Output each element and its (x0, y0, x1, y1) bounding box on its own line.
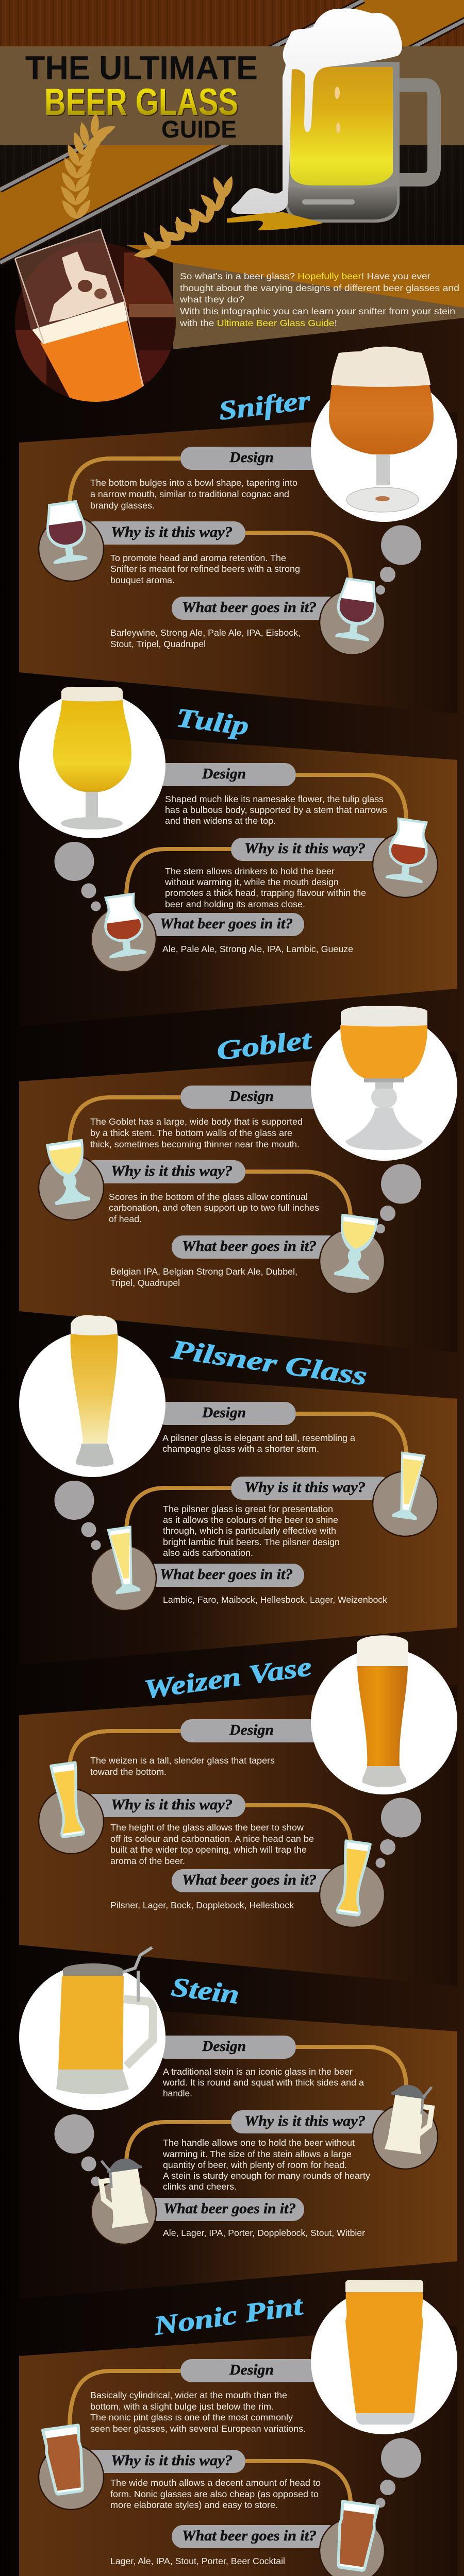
photo: tulip glass (19, 687, 165, 838)
thought bubbles (375, 2438, 421, 2508)
icon: weizen 1 (49, 1761, 87, 1839)
text: why: without warming it, while the mouth design (164, 877, 339, 887)
text: why: A stein is sturdy enough for many rounds of hearty (163, 2171, 370, 2181)
icon: wheat stalk left (58, 112, 117, 222)
icon circle 2 (91, 2179, 156, 2244)
text: design (90, 2390, 306, 2434)
icon circle 1 (373, 2104, 438, 2169)
connectors (70, 1097, 351, 1218)
icon: snifter 1 (43, 499, 90, 565)
icon circle 2 (320, 1229, 385, 1294)
beer foam (231, 8, 402, 214)
icon: snifter 2 (333, 577, 380, 642)
panel: tulip background (19, 728, 457, 1026)
pill: design: Design (229, 449, 274, 466)
icon: tulip 1 (385, 817, 432, 884)
text: what: Ale, Pale Ale, Strong Ale, IPA, Lambic, Gueuze (162, 944, 353, 954)
pill: what: What beer goes in it? (160, 916, 293, 932)
text: design (90, 1755, 275, 1777)
icon circle 2 (320, 1862, 385, 1927)
photo: tilted beer glass in circle (15, 229, 180, 412)
intro text: thought about the varying designs of different beer glasses and (180, 283, 459, 293)
text: design: A pilsner glass is elegant and tall, resembling a (162, 1433, 355, 1443)
pill: why: Why is it this way? (111, 524, 233, 540)
pill: what (172, 597, 340, 620)
pill: what (144, 1564, 304, 1587)
icon: tulip 2 (100, 892, 147, 959)
pill: what (172, 2525, 340, 2548)
icon circle 1 (39, 1789, 104, 1854)
header wood background (0, 0, 464, 252)
text: what: Belgian IPA, Belgian Strong Dark Ale, Dubbel, (110, 1266, 297, 1277)
intro text: what they do? (179, 294, 244, 304)
connectors (70, 2371, 351, 2504)
text: why: as it allows the colours of the beer to shine (163, 1515, 338, 1525)
intro text: with the Ultimate Beer Glass Guide ! (179, 318, 337, 328)
photo: weizen glass (311, 1635, 457, 1794)
pill: what (172, 1235, 340, 1259)
icon: wheat stalk right (133, 175, 236, 260)
pill: what: What beer goes in it? (182, 2528, 317, 2544)
section: Goblet (19, 1006, 457, 1352)
connectors (70, 459, 351, 580)
text: why: more elaborate styles) and easy to store. (110, 2500, 278, 2510)
pill: design: Design (229, 1722, 274, 1738)
pill: what (172, 1869, 340, 1892)
text: design: The Goblet has a large, wide body that is supported (90, 1116, 303, 1127)
text: why (164, 866, 366, 909)
panel: weizen background (19, 1685, 457, 1986)
pill: design (155, 2036, 296, 2059)
pill: design (180, 447, 325, 470)
text: what: Tripel, Quadrupel (110, 1278, 180, 1288)
thought bubbles (55, 842, 101, 911)
beer mug glass (285, 62, 400, 223)
text: design: has a bulbous body, supported by a stem that narrows (165, 805, 387, 815)
thought bubbles (55, 1481, 101, 1550)
section: Snifter (19, 347, 457, 714)
text: design: toward the bottom. (90, 1767, 167, 1777)
text: design: and then widens at the top. (165, 816, 276, 826)
panel: pilsner background (19, 1367, 457, 1665)
text: design: handle. (163, 2088, 192, 2098)
text: why: Scores in the bottom of the glass allow continual (109, 1192, 308, 1202)
text: design: Basically cylindrical, wider at the mouth than the (90, 2390, 287, 2400)
photo: nonic glass (311, 2280, 457, 2434)
section: Weizen Vase (19, 1635, 457, 1986)
icon circle 2 (320, 590, 385, 655)
text: why (109, 1192, 319, 1224)
icon circle 2 (91, 1546, 156, 1611)
gold wedge behind intro (126, 245, 464, 309)
pill: design (180, 1086, 325, 1109)
icon circle 2 (320, 2518, 385, 2576)
pill: design: Design (229, 1088, 274, 1105)
text: what: Stout, Tripel, Quadrupel (110, 639, 206, 649)
connectors (70, 1731, 351, 1843)
text: design: The weizen is a tall, slender glass that tapers (90, 1755, 275, 1766)
pill: what: What beer goes in it? (182, 1872, 317, 1888)
title (25, 49, 258, 143)
text: design: The nonic pint glass is one of the most commonly (90, 2412, 293, 2422)
text: why: off its colour and carbonation. A nice head can be (110, 1834, 314, 1844)
text: what: Lager, Ale, IPA, Stout, Porter, Beer Cocktail (110, 2556, 285, 2566)
pill: why: Why is it this way? (111, 1797, 233, 1813)
panel: snifter background (19, 412, 457, 714)
title: BEER GLASS (44, 81, 238, 123)
pill: what (144, 2198, 304, 2221)
title: Goblet: Goblet (215, 1025, 314, 1066)
text: why: The handle allows one to hold the beer without (163, 2138, 355, 2148)
title: Tulip: Tulip (175, 703, 250, 741)
text: what: Ale, Lager, IPA, Porter, Dopplebock, Stout, Witbier (163, 2228, 365, 2238)
pill: why: Why is it this way? (244, 1479, 366, 1496)
text: what: Pilsner, Lager, Bock, Dopplebock, Hellesbock (110, 1900, 294, 1910)
title: THE ULTIMATE (25, 49, 258, 87)
pill: what: What beer goes in it? (182, 1238, 317, 1255)
text: why: promotes a thick head, trapping flavour within the (165, 888, 366, 898)
intro text (179, 271, 459, 328)
pill: why (231, 2110, 392, 2133)
thought bubbles (376, 1164, 421, 1233)
text: why: To promote head and aroma retention. The (110, 553, 286, 563)
icon circle 1 (39, 1155, 104, 1220)
text: why (162, 2138, 370, 2192)
section: Pilsner Glass (19, 1315, 457, 1665)
text: why: clinks and cheers. (163, 2181, 237, 2192)
title: GUIDE (161, 115, 237, 143)
text: why: The stem allows drinkers to hold the beer (165, 866, 335, 876)
text: why: bright lambic fruit beers. The pilsner design (163, 1537, 340, 1547)
photo: goblet glass (311, 1006, 457, 1161)
text: design (165, 794, 387, 826)
text: design: seen beer glasses, with several European variations. (90, 2424, 306, 2434)
pill: design (180, 1719, 325, 1742)
icon: nonic 2 (332, 2500, 379, 2573)
text: design: world. It is round and squat with thick sides and a (162, 2077, 364, 2088)
section: Stein (19, 1947, 457, 2299)
text: why: aroma of the beer. (110, 1856, 185, 1866)
title: Nonic Pint: Nonic Pint (152, 2291, 305, 2341)
mug handle (397, 85, 434, 180)
spilled beer puddle (227, 212, 323, 230)
pill: why: Why is it this way? (244, 2113, 366, 2129)
text: why: bouquet aroma. (110, 575, 175, 585)
title: Pilsner Glass: Pilsner Glass (169, 1335, 369, 1391)
text: what (110, 628, 301, 649)
text: design (162, 1433, 355, 1454)
text: design: bottom, with a slight bulge just below the rim. (90, 2401, 274, 2412)
icon: goblet 1 (46, 1139, 91, 1205)
pill: why (231, 1477, 392, 1500)
text: why: The height of the glass allows the beer to show (110, 1822, 304, 1833)
text: why: beer and holding its aromas close. (165, 899, 305, 909)
text: why: warming it. The size of the stein allows a large (162, 2149, 352, 2159)
text: design (90, 478, 297, 511)
section: Tulip (19, 687, 457, 1026)
icon circle 1 (39, 516, 104, 581)
pill: why (82, 2450, 245, 2473)
text: why: The pilsner glass is great for presentation (163, 1504, 333, 1514)
pill: why (82, 1160, 245, 1183)
pill: why (231, 838, 392, 861)
text: what: Barleywine, Strong Ale, Pale Ale, IPA, Eisbock, (110, 628, 301, 638)
pill: design (155, 1402, 296, 1425)
intro text: With this infographic you can learn your snifter from your stein (180, 306, 455, 316)
text: why (110, 553, 300, 585)
intro text: So what's in a beer glass? Hopefully beer ! Have you ever (180, 271, 430, 281)
icon circle 1 (39, 2445, 104, 2510)
panel: stein background (19, 2001, 457, 2299)
pill: why: Why is it this way? (111, 2452, 233, 2469)
icon: pilsner 2 (107, 1526, 141, 1595)
icon: stein 1 (384, 2081, 435, 2155)
panel: goblet background (19, 1051, 457, 1352)
thought bubbles (55, 2114, 101, 2187)
text: why: carbonation, and often support up to two full inches (109, 1202, 319, 1213)
photo: snifter glass (311, 347, 457, 522)
text: what (110, 1266, 297, 1288)
thought bubbles (375, 1798, 421, 1868)
pill: design: Design (202, 2038, 246, 2055)
panel: intro background (173, 263, 464, 349)
pill: design (180, 2359, 325, 2382)
pill: what (144, 913, 304, 936)
text: why: quantity of beer, with plenty of room for head. (163, 2160, 347, 2170)
icon: nonic 1 (41, 2424, 89, 2497)
pill: why (82, 1794, 245, 1817)
text: why: Snifter is meant for refined beers with a strong (110, 564, 300, 574)
icon: pilsner 1 (392, 1451, 426, 1520)
pill: why (82, 521, 245, 545)
connectors (126, 1414, 406, 1533)
icon circle 1 (373, 1471, 438, 1536)
title: BEER GLASS (45, 82, 239, 124)
pill: what: What beer goes in it? (182, 599, 317, 616)
icon: goblet 2 (333, 1214, 378, 1280)
photo: stein (19, 1947, 165, 2110)
text: why: also aids carbonation. (163, 1548, 253, 1558)
text: why: of head. (109, 1214, 142, 1224)
text: why (163, 1504, 340, 1558)
title band (0, 46, 464, 145)
text: why: through, which is particularly effective with (163, 1526, 336, 1536)
text: design: brandy glasses. (90, 500, 155, 511)
text: why (110, 2478, 321, 2510)
pill: what: What beer goes in it? (163, 2200, 296, 2217)
text: design: a narrow mouth, similar to traditional cognac and (90, 489, 289, 499)
pill: design: Design (202, 1404, 246, 1421)
text: what: Lambic, Faro, Maibock, Hellesbock, Lager, Weizenbock (163, 1595, 387, 1605)
connectors (126, 775, 406, 897)
icon circle 2 (91, 907, 156, 972)
connectors (126, 2047, 406, 2164)
pill: why: Why is it this way? (111, 1163, 233, 1179)
pill: design: Design (202, 766, 246, 782)
title: Weizen Vase: Weizen Vase (142, 1652, 313, 1705)
title: Stein: Stein (170, 1972, 241, 2010)
text: design: Shaped much like its namesake flower, the tulip glass (165, 794, 384, 804)
text: why (110, 1822, 314, 1866)
text: design: A traditional stein is an iconic glass in the beer (163, 2066, 353, 2077)
icon circle 1 (373, 833, 438, 897)
text: design (162, 2066, 364, 2098)
text: design: thick, sometimes becoming thinner near the mouth. (90, 1139, 300, 1149)
text: design: champagne glass with a shorter stem. (162, 1444, 319, 1454)
diagonal gold stripe (0, 0, 464, 263)
section: Nonic Pint (19, 2280, 457, 2576)
icon: weizen 2 (335, 1839, 372, 1917)
pill: design (155, 763, 296, 786)
pill: what: What beer goes in it? (160, 1566, 293, 1583)
title: Snifter: Snifter (217, 385, 312, 426)
text: why: form. Nonic glasses are also cheap (as opposed to (110, 2489, 319, 2499)
icon: stein 2 (98, 2155, 150, 2229)
thought bubbles (376, 526, 421, 595)
pill: why: Why is it this way? (244, 840, 366, 857)
text: design: The bottom bulges into a bowl shape, tapering into (90, 478, 297, 488)
panel: nonic background (19, 2326, 457, 2576)
text: why: built at the wider top opening, which will trap the (110, 1844, 307, 1855)
text: why: The wide mouth allows a decent amount of head to (110, 2478, 321, 2488)
photo: pilsner glass (19, 1315, 165, 1477)
text: design (90, 1116, 303, 1149)
text: design: by a thick stem. The bottom walls of the glass are (90, 1128, 292, 1138)
pill: design: Design (229, 2362, 274, 2378)
